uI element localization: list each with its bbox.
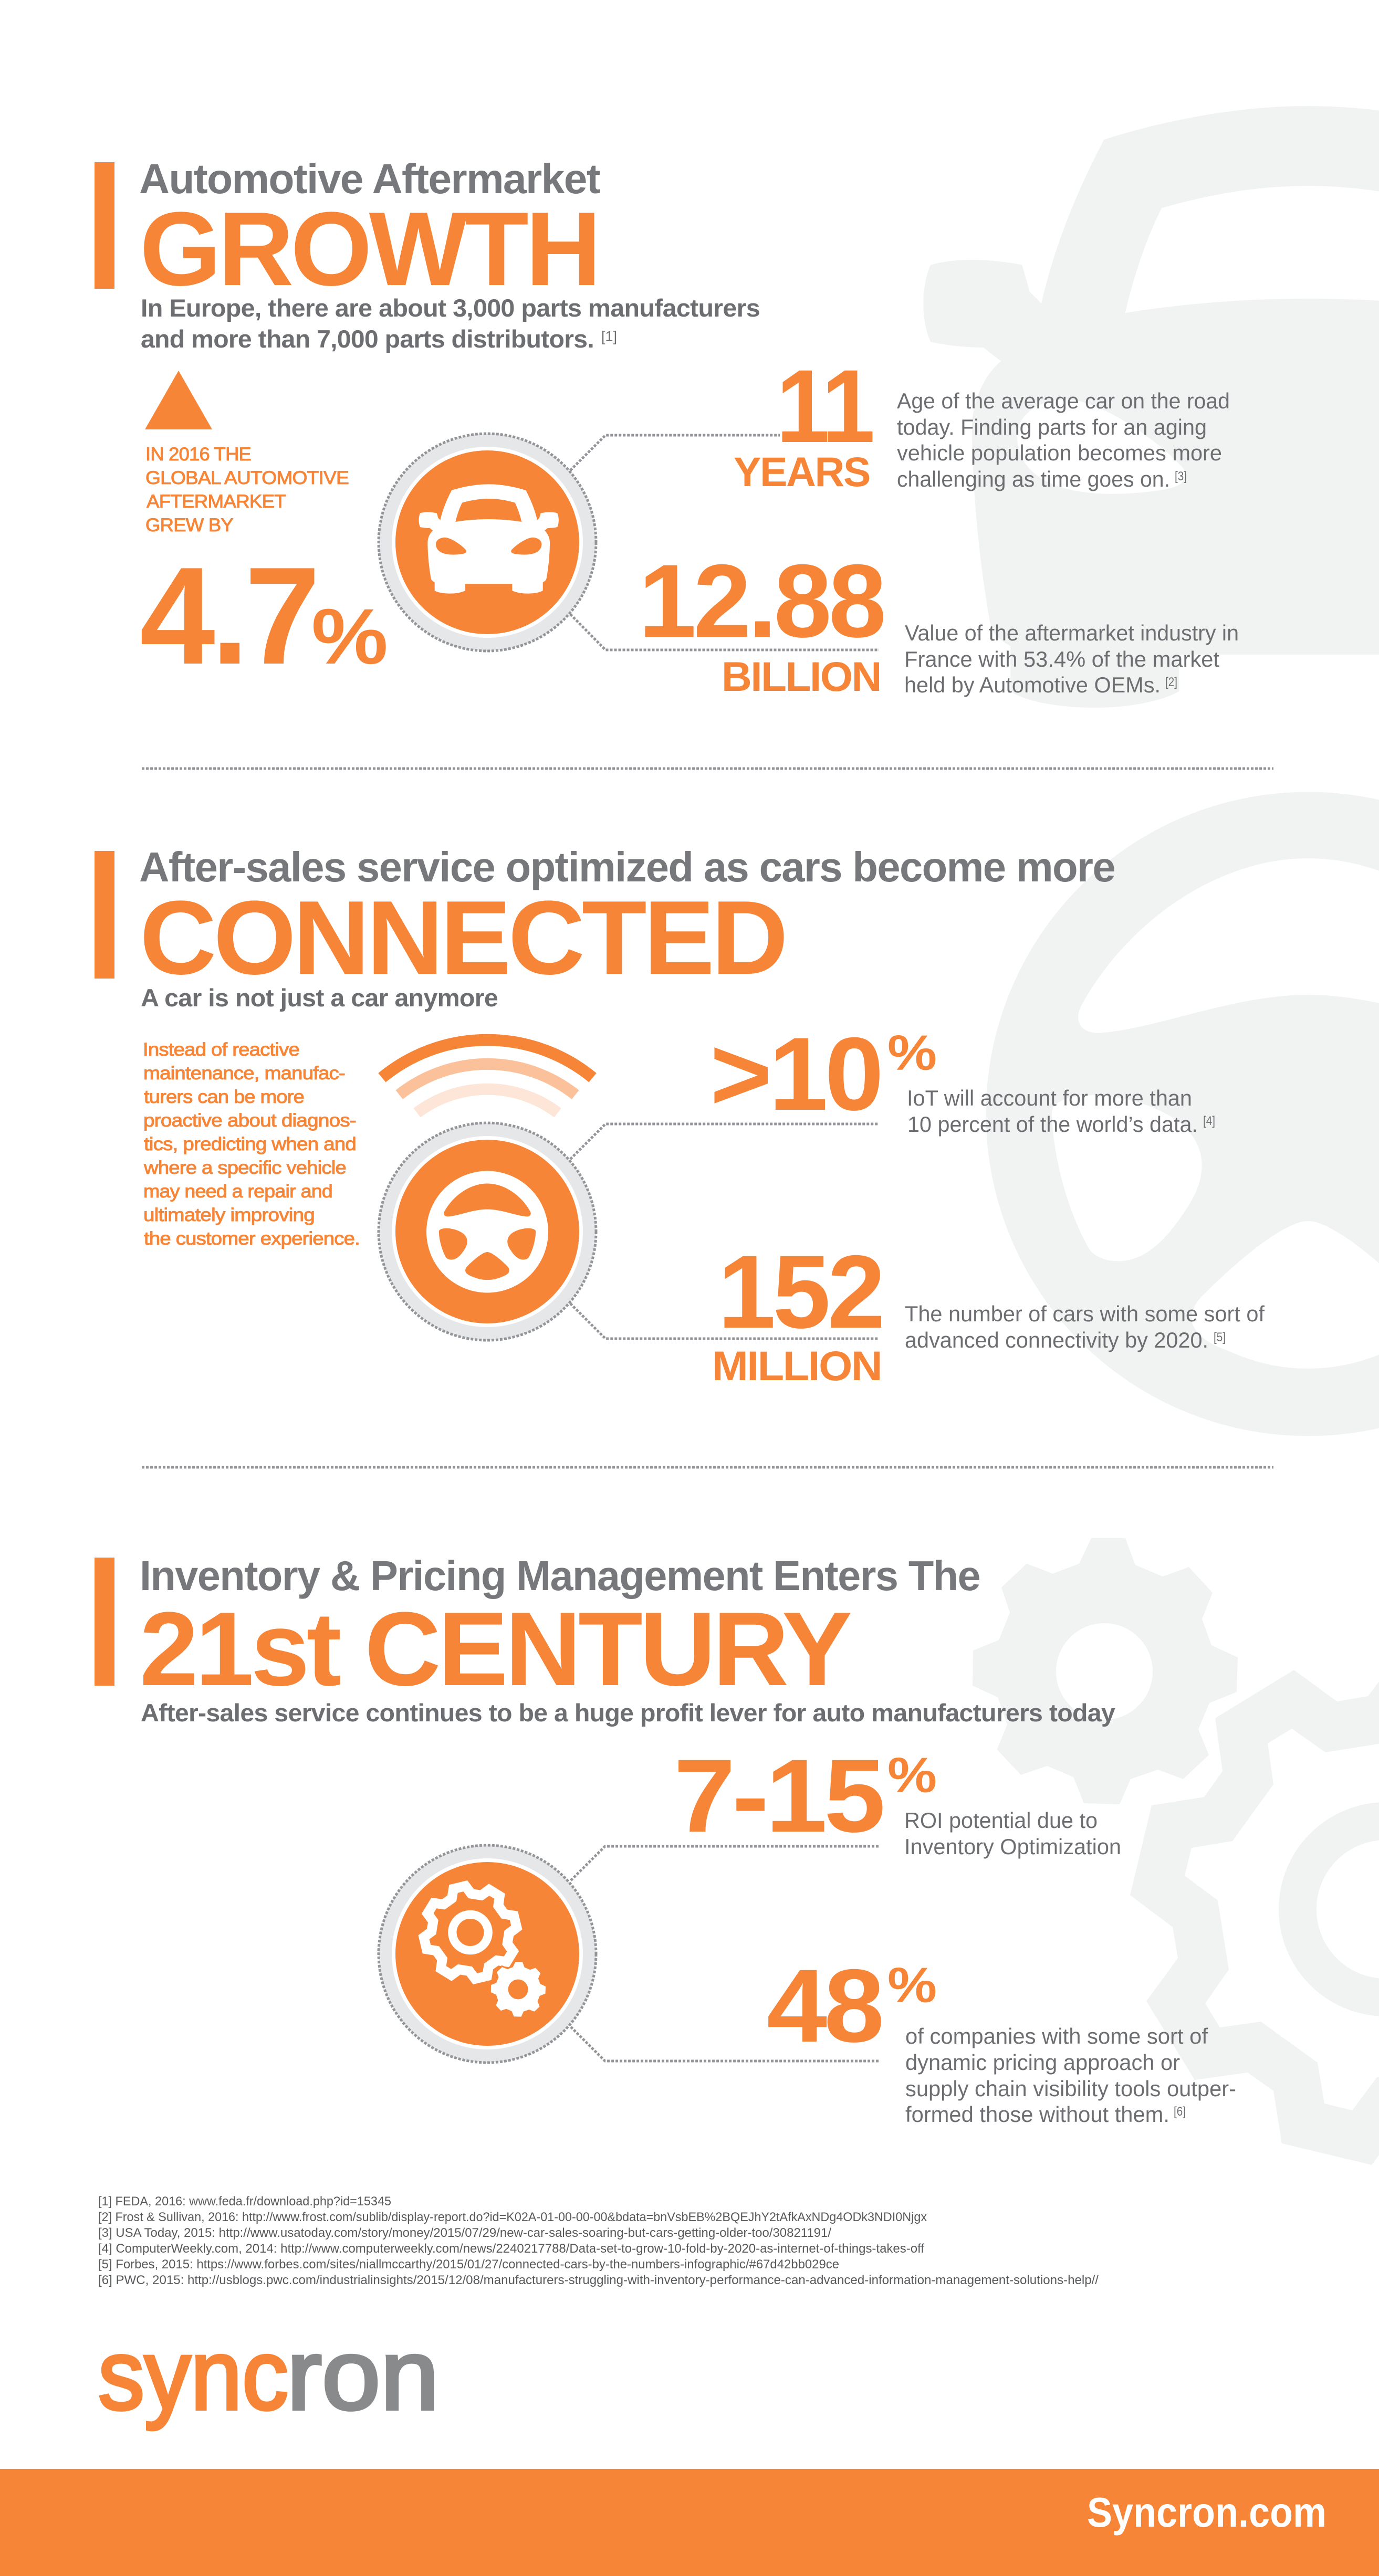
text: average car age: vehicle population becomes more <box>897 440 1222 465</box>
text: France aftermarket value <box>904 621 1239 697</box>
connector lines <box>570 1124 879 1339</box>
orange body text: Instead of reactive <box>143 1039 299 1060</box>
text: average car age: Age of the average car on the road <box>897 388 1230 413</box>
text: France aftermarket value: [2] <box>1165 675 1177 689</box>
intro text: After-sales service continues to be a huge profit lever for auto manufacturers today <box>141 1699 1115 1727</box>
orange body text: maintenance, manufac- <box>143 1063 345 1084</box>
logo: syncron: ron <box>287 2319 439 2431</box>
icon: gears badge <box>379 1845 596 2063</box>
callout text: 2016 growth <box>145 444 349 535</box>
text: average car age: challenging as time goes on. <box>897 467 1170 491</box>
stat: 7-15 percent: % <box>887 1748 937 1803</box>
footnotes: [5] Forbes, 2015: https://www.forbes.com/sites/niallmccarthy/2015/01/27/connected-cars-by-the-numbers-infographic/#67d42bb029ce <box>98 2257 839 2272</box>
text: dynamic pricing: formed those without them. <box>905 2102 1169 2127</box>
section kicker: Inventory & Pricing Management Enters The <box>140 1552 980 1599</box>
footnotes: [6] PWC, 2015: http://usblogs.pwc.com/industrialinsights/2015/12/08/manufacturers-struggling-with-inventory-performance-can-advanced-information-management-solutions-help// <box>98 2273 1099 2287</box>
connector lines <box>570 435 879 650</box>
text: ROI potential: Inventory Optimization <box>904 1834 1121 1859</box>
stat: 11 years <box>734 348 873 495</box>
panel: 21st century <box>95 1552 1236 2127</box>
text: dynamic pricing: [6] <box>1174 2105 1186 2119</box>
orange body text <box>143 1039 360 1249</box>
footnotes <box>98 2194 1099 2287</box>
text: IoT share: IoT will account for more than <box>907 1086 1192 1110</box>
orange body text: turers can be more <box>144 1087 304 1107</box>
orange body text: proactive about diagnos- <box>143 1110 356 1131</box>
text: connected car count: The number of cars with some sort of <box>905 1301 1265 1326</box>
heading: connected: CONNECTED <box>140 879 785 996</box>
accent bar <box>95 162 114 289</box>
footnotes: [2] Frost & Sullivan, 2016: http://www.frost.com/sublib/display-report.do?id=K02A-01-00-00-00&bdata=bnVsbEB%2BQEJhY2tAfkAxNDg4ODk3NDI0Njgx <box>98 2210 927 2224</box>
footer band <box>0 2469 1379 2576</box>
intro text: A car is not just a car anymore <box>141 984 498 1012</box>
footnotes: [1] FEDA, 2016: www.feda.fr/download.php?id=15345 <box>98 2194 391 2209</box>
text: IoT share: 10 percent of the world’s data. <box>907 1112 1198 1137</box>
text: France aftermarket value: Value of the aftermarket industry in <box>905 621 1239 645</box>
stat: 11 years: 11 <box>776 348 873 464</box>
orange body text: ultimately improving <box>143 1205 315 1225</box>
heading: growth: GROWTH <box>140 191 598 308</box>
stat: 12.88 billion: 12.88 <box>639 543 884 659</box>
stat: 11 years: YEARS <box>734 448 870 495</box>
intro text: and more than 7,000 parts distributors. <box>141 325 594 353</box>
stat: 48 percent: 48 <box>767 1948 882 2064</box>
background: large gear <box>1130 1654 1379 2165</box>
text: France aftermarket value: held by Automotive OEMs. <box>904 672 1161 697</box>
orange body text: where a specific vehicle <box>143 1158 346 1178</box>
logo: syncron <box>98 2319 439 2431</box>
text: average car age: today. Finding parts for an aging <box>897 415 1207 439</box>
stat: more than 10 percent: % <box>887 1025 937 1081</box>
footnotes: [3] USA Today, 2015: http://www.usatoday.com/story/money/2015/07/29/new-car-sales-soaring-but-cars-getting-older-too/30821191/ <box>98 2226 831 2240</box>
intro text <box>141 294 760 353</box>
text: dynamic pricing <box>905 2024 1236 2127</box>
text: IoT share: [4] <box>1203 1114 1215 1128</box>
text: dynamic pricing: of companies with some sort of <box>905 2024 1208 2048</box>
panel: growth <box>95 155 1239 700</box>
callout text: 2016 growth: AFTERMARKET <box>147 491 286 512</box>
stat: 48 percent: % <box>887 1958 937 2013</box>
text: connected car count <box>905 1301 1265 1352</box>
text: dynamic pricing: dynamic pricing approach or <box>905 2050 1180 2075</box>
callout text: 2016 growth: IN 2016 THE <box>145 444 251 465</box>
orange body text: may need a repair and <box>143 1181 332 1202</box>
stat: 12.88 billion: BILLION <box>722 653 881 700</box>
panel: connected <box>95 844 1265 1389</box>
accent bar <box>95 1558 114 1686</box>
text: average car age <box>897 388 1230 491</box>
icon: car badge <box>379 434 596 651</box>
icon: steering wheel badge <box>379 1123 596 1340</box>
icon: up triangle <box>145 371 212 429</box>
orange body text: tics, predicting when and <box>144 1134 356 1154</box>
text: connected car count: advanced connectivity by 2020. <box>905 1328 1208 1352</box>
section kicker: Automotive Aftermarket <box>139 155 600 202</box>
orange body text: the customer experience. <box>144 1228 360 1249</box>
text: connected car count: [5] <box>1214 1330 1226 1344</box>
stat: 152 million: MILLION <box>712 1342 881 1389</box>
intro text: In Europe, there are about 3,000 parts manufacturers <box>141 294 760 322</box>
connector lines <box>571 1846 879 2061</box>
intro text: [1] <box>601 328 617 344</box>
text: ROI potential: ROI potential due to <box>904 1808 1098 1833</box>
background: steering wheel <box>986 792 1379 1436</box>
background: small gear <box>973 1538 1238 1804</box>
stat: 48 percent <box>767 1948 937 2064</box>
stat: more than 10 percent: >10 <box>710 1016 881 1132</box>
callout text: 2016 growth: GLOBAL AUTOMOTIVE <box>145 468 349 488</box>
stat: 4.7 percent: 4.7 <box>140 538 316 693</box>
footnotes: [4] ComputerWeekly.com, 2014: http://www.computerweekly.com/news/2240217788/Data-set-to-grow-10-fold-by-2020-as-internet-of-things-takes-off <box>98 2242 924 2256</box>
accent bar <box>95 851 114 979</box>
text: ROI potential <box>904 1808 1121 1859</box>
callout text: 2016 growth: GREW BY <box>145 515 233 535</box>
heading: 21st century: 21st CENTURY <box>140 1591 851 1708</box>
stat: 152 million: 152 <box>718 1234 882 1350</box>
website link text: Syncron.com <box>1087 2489 1326 2536</box>
logo: syncron: sync <box>98 2319 288 2431</box>
stat: 7-15 percent: 7-15 <box>674 1738 883 1854</box>
text: IoT share <box>907 1086 1215 1137</box>
icon: signal arcs <box>382 1040 593 1113</box>
text: France aftermarket value: France with 53.4% of the market <box>904 647 1219 671</box>
text: dynamic pricing: supply chain visibility tools outper- <box>905 2076 1236 2101</box>
stat: 4.7 percent: % <box>311 592 388 680</box>
section kicker: After-sales service optimized as cars become more <box>139 844 1115 890</box>
text: average car age: [3] <box>1175 469 1187 483</box>
background: car silhouette <box>923 106 1379 708</box>
